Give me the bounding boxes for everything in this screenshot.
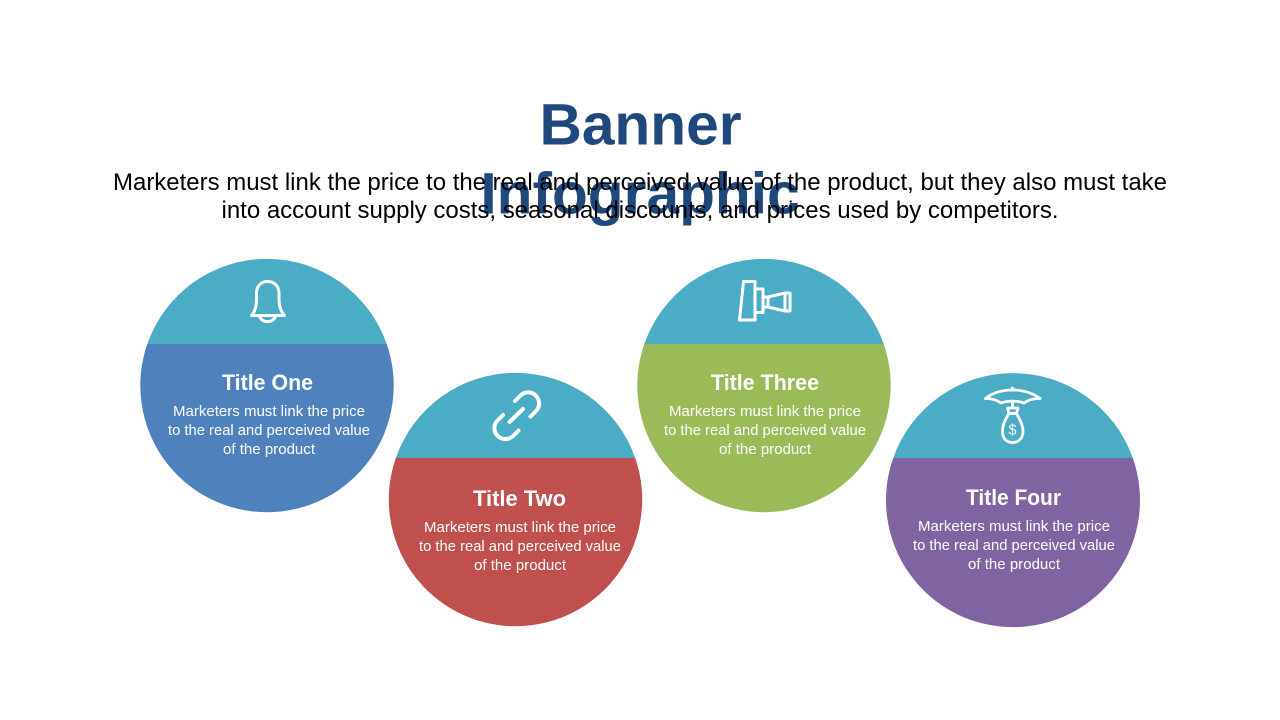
- icon: umbrella money bag: [986, 388, 1040, 442]
- heading: title two: Title Two: [473, 486, 566, 511]
- text block: title three: [664, 404, 866, 458]
- title: Infographic: [480, 162, 800, 226]
- text block: title four: of the product: [968, 557, 1060, 573]
- text block: title four: Marketers must link the price: [918, 519, 1110, 535]
- text block: title two: of the product: [474, 558, 566, 574]
- icon: flashlight: [740, 282, 790, 320]
- icon: bell: [252, 282, 284, 322]
- text block: title three: Marketers must link the price: [669, 404, 861, 420]
- title: [480, 92, 800, 226]
- text block: title two: to the real and perceived value: [419, 539, 621, 555]
- title: Banner: [539, 92, 742, 158]
- heading: title one: Title One: [222, 370, 313, 395]
- heading: title three: Title Three: [711, 370, 819, 395]
- text block: title two: Marketers must link the price: [424, 520, 616, 536]
- text block: title three: of the product: [719, 442, 811, 458]
- icon: dollar sign: $: [1008, 422, 1017, 438]
- text block: title two: [419, 520, 621, 574]
- text block: title four: [913, 519, 1115, 573]
- text block: title one: [168, 404, 370, 458]
- panel: title two: [389, 373, 642, 626]
- panel: title one: [140, 259, 394, 512]
- text block: title one: Marketers must link the price: [173, 404, 365, 420]
- intro text: [113, 169, 1167, 224]
- icon: link: [494, 392, 539, 439]
- text block: title three: to the real and perceived value: [664, 423, 866, 439]
- panel: title four: [886, 373, 1140, 627]
- intro text: Marketers must link the price to the real and perceived value of the product, but they also must take: [113, 169, 1167, 196]
- text block: title one: to the real and perceived value: [168, 423, 370, 439]
- text block: title one: of the product: [223, 442, 315, 458]
- heading: title four: Title Four: [966, 485, 1061, 510]
- intro text: into account supply costs, seasonal discounts, and prices used by competitors.: [222, 197, 1058, 224]
- panel: title three: [637, 259, 891, 512]
- text block: title four: to the real and perceived value: [913, 538, 1115, 554]
